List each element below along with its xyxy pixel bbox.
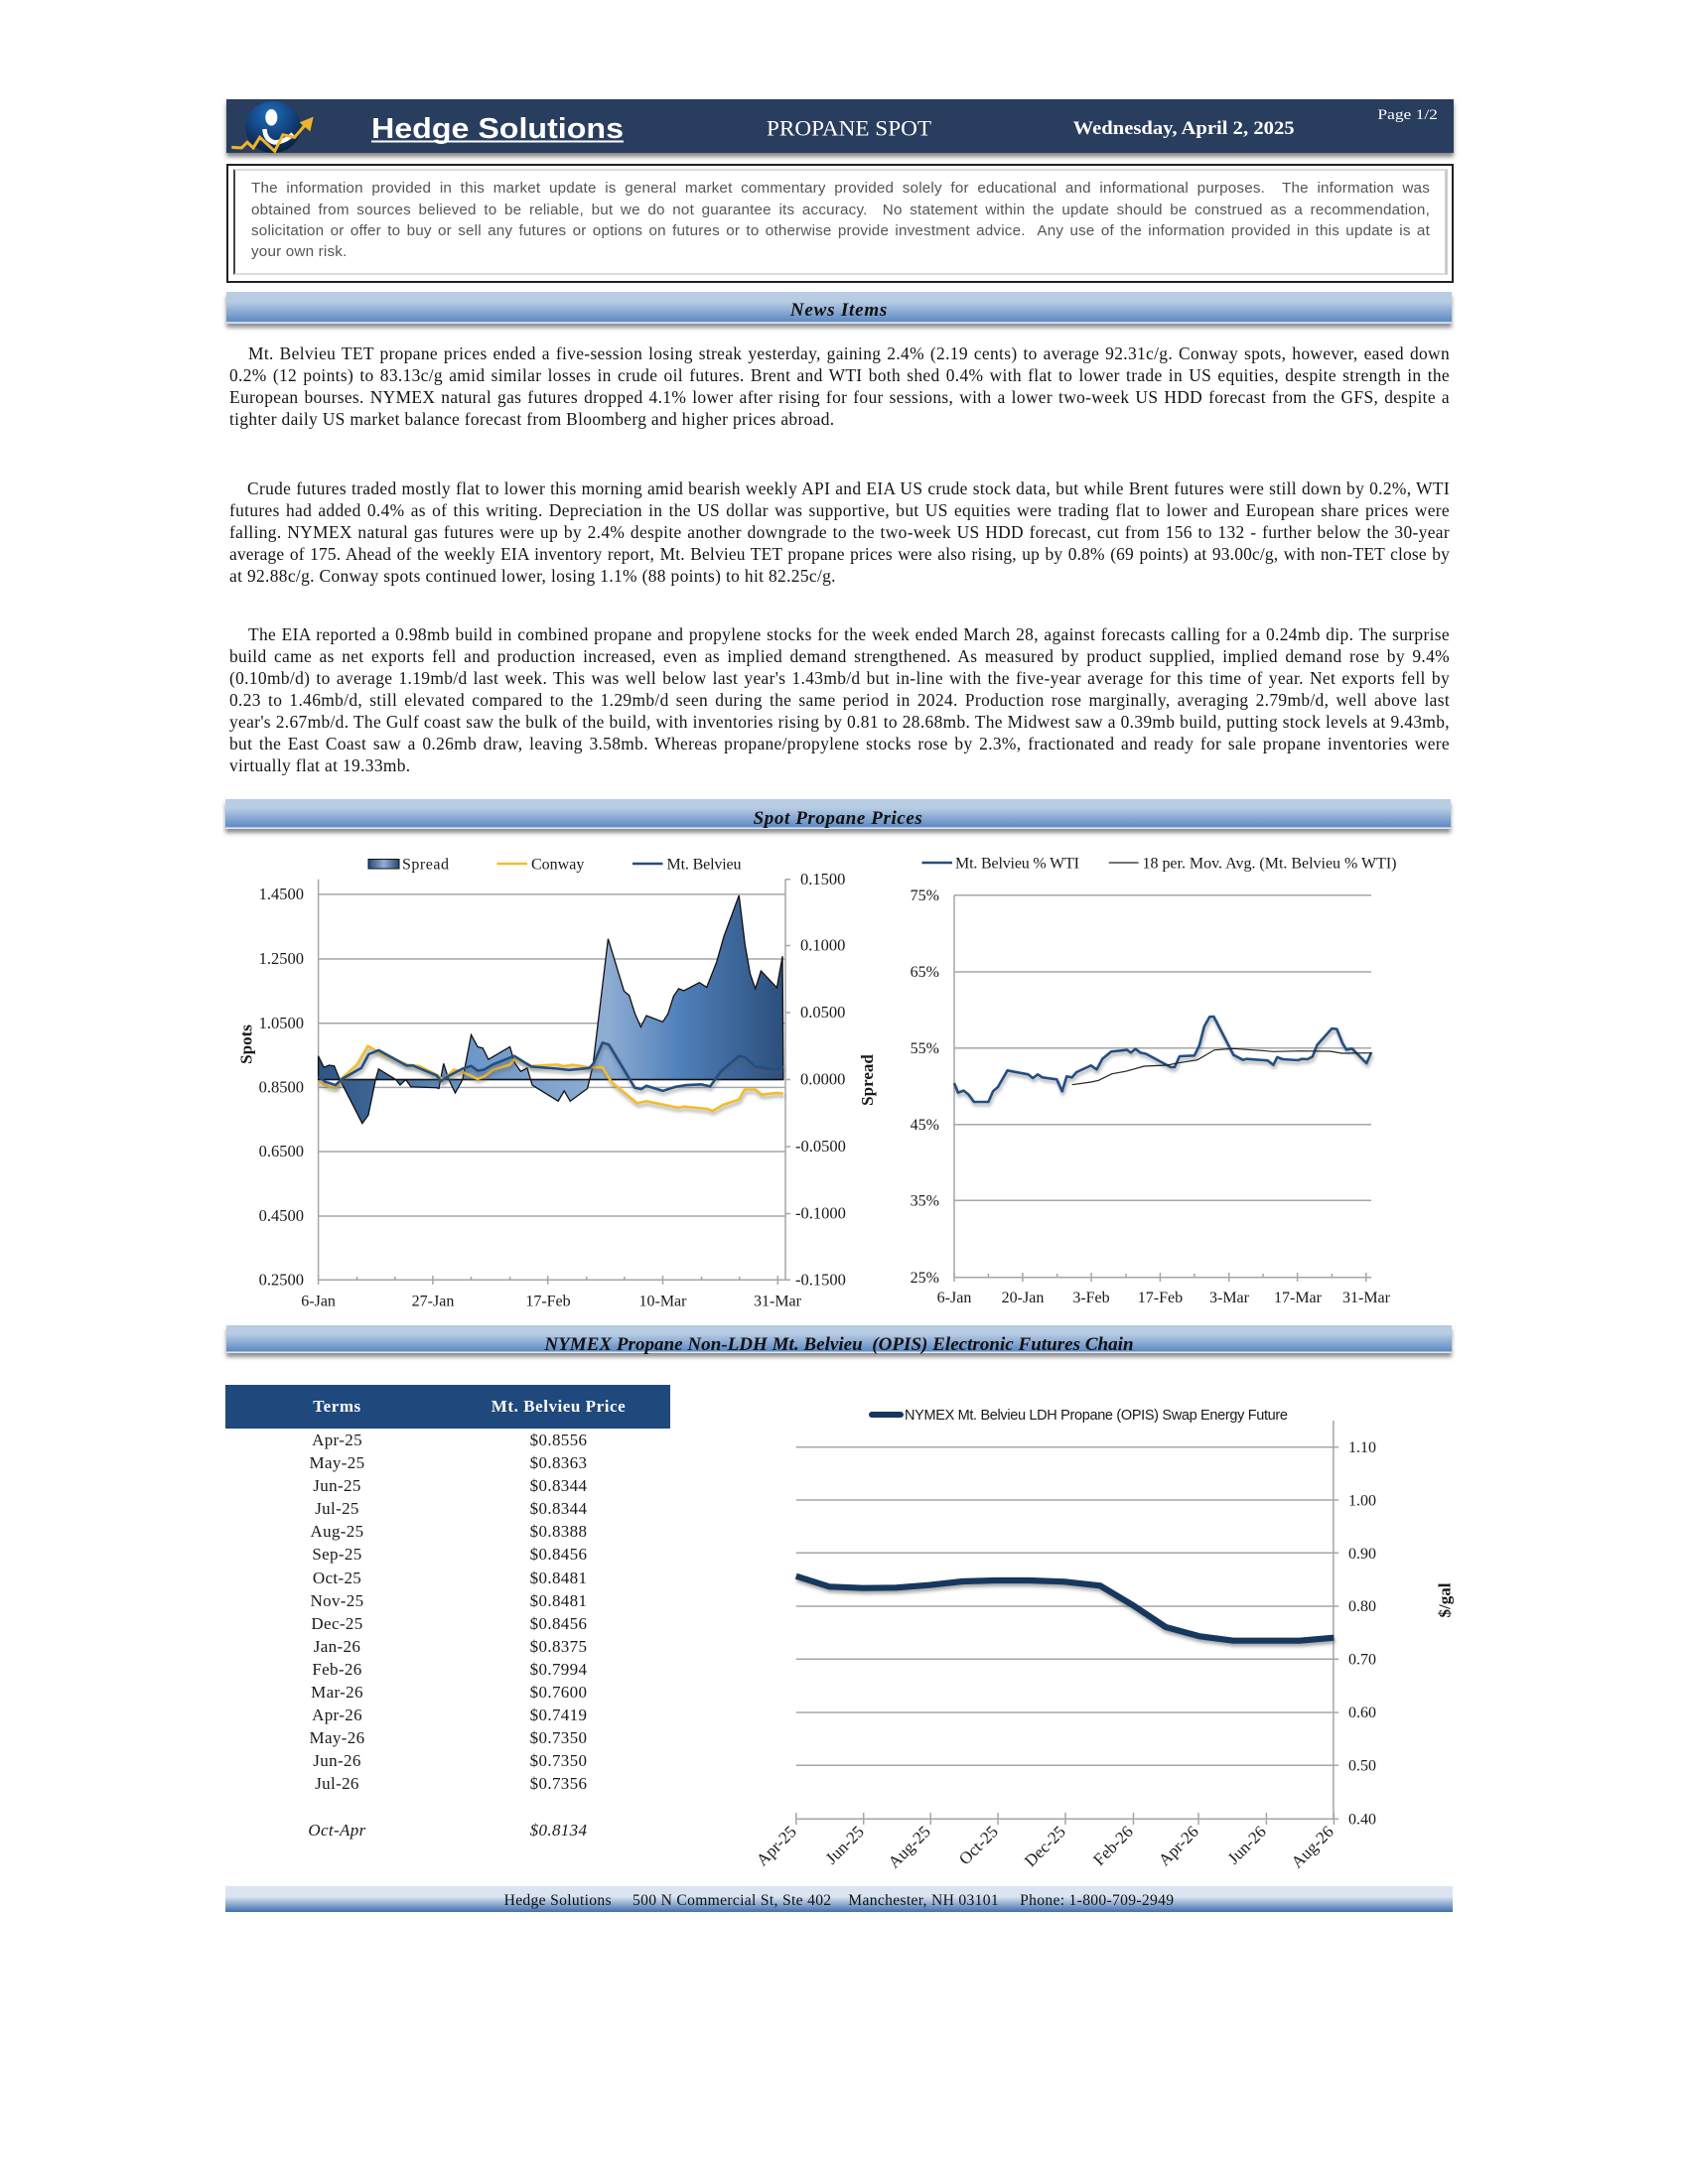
- spread zero line: [319, 1078, 783, 1080]
- right axis labels: 0.1500: [800, 870, 845, 888]
- header bar: [226, 99, 1454, 153]
- disclaimer text: obtained from sources believed to be reliable, but we do not guarantee its accuracy. No statement within the update should be construed as a recommendation,: [251, 202, 1430, 218]
- gridlines and axes: [319, 880, 790, 1285]
- heading: Spot Propane Prices: [225, 799, 1451, 829]
- gridlines and axes: [796, 1421, 1338, 1825]
- news paragraph 2: [229, 478, 1450, 586]
- table: futures chain prices: Aug-25: [310, 1522, 364, 1541]
- table: futures chain prices: Apr-25: [312, 1431, 362, 1449]
- percent axis labels: 55%: [911, 1040, 939, 1057]
- news paragraph 1: 0.2% (12 points) to 83.13c/g amid similar losses in crude oil futures. Brent and WTI both shed 0.4% with flat to lower trade in US equities, despite strength in the: [229, 365, 1450, 385]
- table: futures chain prices: $0.7356: [530, 1774, 587, 1793]
- table: futures chain prices: [225, 1385, 670, 1840]
- news paragraph 3: build came as net exports fell and production increased, even as implied demand strengthened. As measured by product supplied, implied demand rose by 9.4%: [229, 646, 1450, 666]
- table: futures chain prices: $0.7994: [530, 1660, 587, 1679]
- heading: NYMEX futures chain: NYMEX Propane Non-LDH Mt. Belvieu (OPIS) Electronic Futures Chain: [544, 1334, 1134, 1355]
- legend: Conway: [531, 856, 584, 874]
- news paragraph 1: [229, 343, 1450, 429]
- table: futures chain prices: $0.7600: [530, 1683, 587, 1702]
- line: futures curve: [796, 1576, 1334, 1641]
- table: futures chain prices: Dec-25: [311, 1614, 363, 1633]
- date axis labels: Feb-26: [1089, 1822, 1137, 1869]
- date axis labels: Aug-25: [885, 1822, 934, 1872]
- table: futures chain prices: May-25: [310, 1453, 364, 1472]
- date axis labels: [753, 1822, 1337, 1872]
- legend: [368, 856, 741, 874]
- left axis labels: 0.6500: [259, 1142, 304, 1160]
- right axis labels: -0.1500: [795, 1271, 846, 1289]
- table: futures chain prices: Jul-25: [315, 1499, 359, 1518]
- table: futures chain prices: Jun-25: [313, 1476, 361, 1495]
- news paragraph 3: but the East Coast saw a 0.26mb draw, leaving 3.58mb. Whereas propane/propylene stocks rose by 2.3%, fractionated and ready for sale propane inventories were: [229, 734, 1450, 753]
- date axis labels: 17-Mar: [1274, 1290, 1323, 1306]
- percent axis labels: 65%: [911, 964, 939, 981]
- news paragraph 3: The EIA reported a 0.98mb build in combined propane and propylene stocks for the week ended March 28, against forecasts calling for a 0.24mb dip. The surprise: [248, 624, 1450, 644]
- legend: Mt. Belvieu: [667, 856, 741, 874]
- footer contact bar: [225, 1886, 1453, 1912]
- axis title: dollars per gallon: $/gal: [1436, 1582, 1454, 1617]
- disclaimer text: The information provided in this market update is general market commentary provided solely for educational and informational purposes. The information was: [251, 180, 1430, 197]
- date axis labels: 10-Mar: [639, 1293, 687, 1310]
- footer contact bar: Hedge Solutions 500 N Commercial St, Ste 402 Manchester, NH 03101 Phone: 1-800-709-2949: [504, 1892, 1174, 1909]
- date axis labels: 3-Mar: [1209, 1290, 1250, 1306]
- price axis labels: 0.40: [1348, 1811, 1376, 1829]
- table: futures chain prices: Sep-25: [312, 1545, 362, 1564]
- header content: [231, 101, 1438, 153]
- table: futures chain prices: Apr-26: [312, 1706, 362, 1724]
- date axis labels: Jun-25: [822, 1822, 868, 1868]
- table: futures chain prices: $0.8456: [530, 1614, 587, 1633]
- table: futures chain prices: $0.8481: [530, 1591, 587, 1610]
- date axis labels: 17-Feb: [525, 1293, 571, 1310]
- news paragraph 1: tighter daily US market balance forecast from Bloomberg and higher prices abroad.: [229, 409, 834, 429]
- line: Mt. Belvieu percent WTI: [954, 1017, 1371, 1102]
- date axis labels: 3-Feb: [1072, 1290, 1110, 1306]
- date axis labels: Jun-26: [1224, 1822, 1270, 1868]
- table: futures chain prices: $0.8363: [530, 1453, 587, 1472]
- heading: News Items: [226, 292, 1452, 324]
- price axis labels: 0.50: [1348, 1757, 1376, 1775]
- table: futures chain prices: Jan-26: [314, 1637, 360, 1656]
- right axis labels: 0.0000: [800, 1070, 845, 1088]
- left axis labels: [259, 885, 304, 1289]
- news paragraph 2: Crude futures traded mostly flat to lower this morning amid bearish weekly API and EIA US crude stock data, but while Brent futures were still down by 0.2%, WTI: [247, 478, 1450, 498]
- date axis labels: 27-Jan: [412, 1293, 454, 1310]
- table: futures chain prices: $0.8388: [530, 1522, 587, 1541]
- percent axis labels: 45%: [911, 1117, 939, 1134]
- report title: PROPANE SPOT: [767, 115, 932, 141]
- axis title: Spread: Spread: [858, 1054, 877, 1106]
- legend: 18 per. Mov. Avg. (Mt. Belvieu % WTI): [1142, 856, 1396, 872]
- price axis labels: 0.80: [1348, 1598, 1376, 1615]
- left axis labels: 1.2500: [259, 949, 304, 968]
- date axis labels: Dec-25: [1021, 1822, 1069, 1870]
- axis title: Spots: Spots: [236, 1024, 256, 1064]
- news paragraph 3: 0.23 to 1.46mb/d, still elevated compared to the 1.29mb/d seen during the same period in 2024. Production rose marginally, averaging 2.79mb/d, well above last: [229, 690, 1450, 710]
- date axis labels: Apr-26: [1155, 1822, 1202, 1869]
- right axis labels: 0.0500: [800, 1003, 845, 1022]
- table: futures chain prices: Oct-25: [313, 1569, 361, 1587]
- price axis labels: 1.10: [1348, 1439, 1376, 1456]
- chart: Mt. Belvieu percent of WTI: [911, 856, 1396, 1306]
- date axis labels: Oct-25: [955, 1822, 1002, 1868]
- disclaimer text: [251, 180, 1430, 260]
- table: futures chain prices: $0.8344: [530, 1476, 587, 1495]
- news paragraph 3: virtually flat at 19.33mb.: [229, 755, 411, 775]
- date axis labels: 6-Jan: [937, 1290, 971, 1306]
- date axis labels: [937, 1290, 1391, 1306]
- table: futures chain prices: $0.8456: [530, 1545, 587, 1564]
- price axis labels: 0.70: [1348, 1652, 1376, 1668]
- table: futures chain prices: $0.7350: [530, 1751, 587, 1770]
- gridlines and axes: [954, 895, 1371, 1282]
- left axis labels: 1.4500: [259, 885, 304, 903]
- percent axis labels: 75%: [911, 887, 939, 904]
- icon: logo globe with person and rising arrow: [231, 101, 314, 153]
- table: futures chain prices: $0.8481: [530, 1569, 587, 1587]
- right axis labels: -0.1000: [795, 1203, 846, 1223]
- chart: spot propane prices and spread: [236, 856, 877, 1310]
- right axis labels: 0.1000: [800, 935, 845, 955]
- date axis labels: 6-Jan: [301, 1293, 336, 1310]
- price axis labels: 1.00: [1348, 1493, 1376, 1509]
- date axis labels: Aug-26: [1288, 1822, 1337, 1872]
- report date: Wednesday, April 2, 2025: [1073, 119, 1295, 139]
- date axis labels: [301, 1293, 802, 1310]
- left axis labels: 0.4500: [259, 1206, 304, 1225]
- table: futures chain prices: $0.8134: [530, 1821, 587, 1840]
- news paragraph 2: average of 175. Ahead of the weekly EIA inventory report, Mt. Belvieu TET propane prices were also rising, up by 0.8% (69 points) at 93.00c/g, with non-TET close by: [229, 544, 1450, 564]
- legend: NYMEX Mt. Belvieu LDH Propane (OPIS) Swap Energy Future: [905, 1408, 1288, 1424]
- percent axis labels: [911, 887, 939, 1287]
- news paragraph 2: futures had added 0.4% as of this writing. Depreciation in the US dollar was supportive, but US equities were trading flat to lower and European share prices were: [229, 500, 1450, 520]
- heading: News Items: News Items: [790, 300, 888, 321]
- left axis labels: 0.8500: [259, 1078, 304, 1096]
- table: futures chain prices: $0.7419: [530, 1706, 587, 1724]
- news paragraph 3: (0.10mb/d) to average 1.19mb/d last week. This was well below last year's 1.43mb/d but in-line with the five-year average for this time of year. Net exports fell by: [229, 668, 1450, 688]
- news paragraph 3: [229, 624, 1450, 775]
- heading: NYMEX futures chain: [226, 1325, 1452, 1353]
- date axis labels: 31-Mar: [1342, 1290, 1391, 1306]
- table: futures chain prices: Mar-26: [311, 1683, 363, 1702]
- right axis labels: [795, 870, 846, 1289]
- left axis labels: 1.0500: [259, 1014, 304, 1032]
- disclaimer text: your own risk.: [251, 243, 347, 260]
- price axis labels: 0.60: [1348, 1705, 1376, 1721]
- table: futures chain prices: Jul-26: [315, 1774, 359, 1793]
- table header: Terms: [313, 1397, 361, 1416]
- news paragraph 2: at 92.88c/g. Conway spots continued lower, losing 1.1% (88 points) to hit 82.25c/g.: [229, 566, 836, 586]
- news paragraph 2: falling. NYMEX natural gas futures were up by 2.4% despite another downgrade to the two-week US HDD forecast, cut from 156 to 132 - further below the 30-year: [229, 522, 1450, 542]
- table header: Mt. Belvieu Price: [492, 1397, 626, 1416]
- table: futures chain prices: $0.7350: [530, 1728, 587, 1747]
- line: Conway: [319, 1046, 783, 1111]
- chart: NYMEX futures curve: [753, 1408, 1454, 1872]
- disclaimer inner frame: [233, 169, 1448, 275]
- left axis labels: 0.2500: [259, 1271, 304, 1289]
- table: futures chain prices: Feb-26: [312, 1660, 362, 1679]
- news paragraph 1: Mt. Belvieu TET propane prices ended a five-session losing streak yesterday, gaining 2.4% (2.19 cents) to average 92.31c/g. Conway spots, however, eased down: [248, 343, 1450, 363]
- disclaimer panel: [226, 164, 1454, 283]
- date axis labels: 31-Mar: [754, 1293, 802, 1310]
- price axis labels: 0.90: [1348, 1546, 1376, 1563]
- date axis labels: 17-Feb: [1138, 1290, 1183, 1306]
- legend: [921, 856, 1396, 872]
- table: futures chain prices: Oct-Apr: [308, 1821, 366, 1840]
- heading: Spot Propane Prices: Spot Propane Prices: [754, 808, 922, 829]
- news paragraph 3: year's 2.67mb/d. The Gulf coast saw the bulk of the build, with inventories rising by 0.81 to 28.68mb. The Midwest saw a 0.39mb build, putting stock levels at 9.43mb,: [229, 712, 1450, 732]
- table: futures chain prices: $0.8556: [530, 1431, 587, 1449]
- right axis labels: -0.0500: [795, 1137, 846, 1156]
- disclaimer text: solicitation or offer to buy or sell any futures or options on futures or to otherwise provide investment advice. Any use of the information provided in this update is at: [251, 222, 1430, 239]
- table: futures chain prices: Nov-25: [310, 1591, 364, 1610]
- page number: Page 1/2: [1377, 107, 1438, 123]
- legend: Mt. Belvieu % WTI: [955, 856, 1079, 872]
- news paragraph 1: European bourses. NYMEX natural gas futures dropped 4.1% lower after rising for four sessions, with a lower two-week US HDD forecast from the GFS, despite a: [229, 387, 1450, 407]
- table: futures chain prices: $0.8344: [530, 1499, 587, 1518]
- percent axis labels: 35%: [911, 1193, 939, 1209]
- table: futures chain prices: Jun-26: [313, 1751, 361, 1770]
- line: Mt. Belvieu: [319, 1042, 783, 1091]
- line: 18 period moving average: [1072, 1048, 1371, 1085]
- table header: [225, 1385, 670, 1429]
- table: futures chain prices: $0.8375: [530, 1637, 587, 1656]
- date axis labels: 20-Jan: [1002, 1290, 1044, 1306]
- spread area: [319, 895, 783, 1124]
- price axis labels: [1348, 1439, 1376, 1829]
- table: futures chain prices: May-26: [310, 1728, 364, 1747]
- percent axis labels: 25%: [911, 1270, 939, 1287]
- date axis labels: Apr-25: [753, 1822, 800, 1869]
- company name: Hedge Solutions: [371, 113, 624, 145]
- legend: Spread: [402, 856, 449, 874]
